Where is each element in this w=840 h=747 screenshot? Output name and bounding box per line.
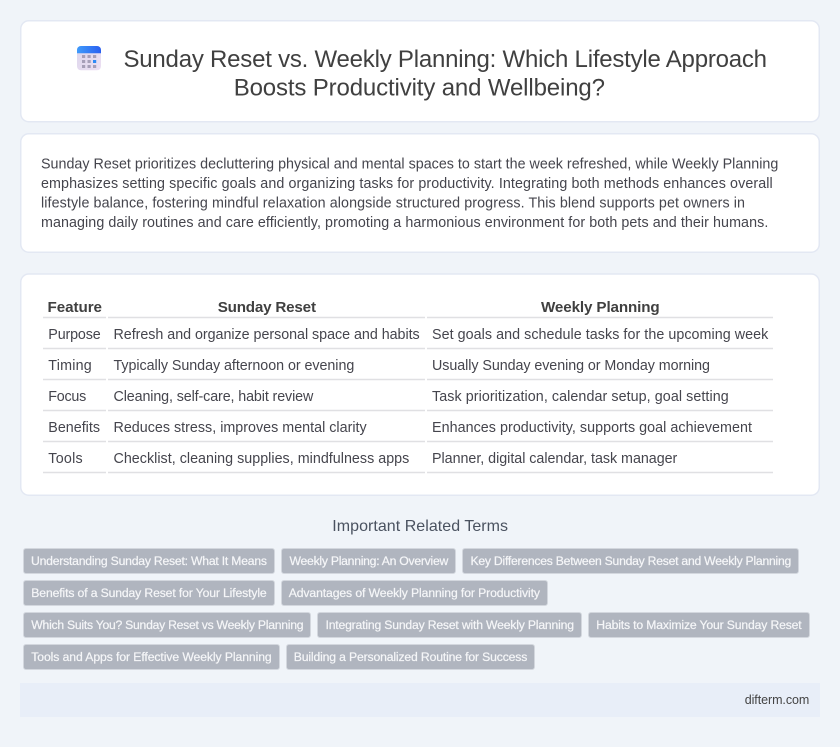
row: purpose: Purpose: [48, 327, 101, 343]
panel: description: [21, 134, 819, 252]
icon: calendar: [77, 46, 101, 70]
row: tools: [48, 451, 678, 467]
title: [124, 46, 767, 102]
tag: Integrating Sunday Reset with Weekly Planning: [326, 618, 574, 632]
tag: Which Suits You? Sunday Reset vs Weekly Planning: [31, 618, 304, 632]
tag: [318, 612, 582, 638]
row: purpose: Refresh and organize personal space and habits: [114, 327, 420, 343]
tag: [24, 644, 280, 670]
description text: [41, 156, 778, 231]
panel: header: [21, 21, 819, 122]
row: timing: Usually Sunday evening or Monday morning: [432, 358, 710, 374]
tag: Weekly Planning: An Overview: [290, 554, 448, 568]
description text: managing daily routines and care efficiently, promoting a harmonious environment for both pets and their humans.: [41, 215, 768, 231]
row: timing: Typically Sunday afternoon or evening: [114, 358, 354, 374]
row: timing: Timing: [48, 358, 92, 374]
row: timing: [48, 358, 710, 374]
row: benefits: [48, 420, 752, 436]
tag: Habits to Maximize Your Sunday Reset: [596, 618, 802, 632]
tag: Benefits of a Sunday Reset for Your Lifestyle: [31, 586, 267, 600]
row: focus: Task prioritization, calendar setup, goal setting: [432, 389, 729, 405]
tag: [24, 612, 310, 638]
row: tools: Planner, digital calendar, task manager: [432, 451, 678, 467]
row: tools: Tools: [48, 451, 83, 467]
row: focus: [48, 389, 729, 405]
title: Sunday Reset vs. Weekly Planning: Which Lifestyle Approach: [124, 46, 767, 73]
tag: Building a Personalized Routine for Success: [294, 650, 527, 664]
row: purpose: [48, 327, 769, 343]
table header: Sunday Reset: [218, 299, 316, 316]
row: purpose: Set goals and schedule tasks for the upcoming week: [432, 327, 769, 343]
row: benefits: Enhances productivity, supports goal achievement: [432, 420, 752, 436]
tag: Advantages of Weekly Planning for Productivity: [289, 586, 541, 600]
row: focus: Cleaning, self-care, habit review: [114, 389, 314, 405]
related terms tags: [24, 548, 810, 670]
panel: comparison table: [21, 274, 819, 495]
tag: Understanding Sunday Reset: What It Means: [31, 554, 267, 568]
title: Boosts Productivity and Wellbeing?: [234, 75, 605, 102]
footer: difterm.com: [745, 693, 809, 707]
tag: [282, 548, 456, 574]
row: focus: Focus: [48, 389, 86, 405]
footer: [20, 683, 820, 717]
tag: Key Differences Between Sunday Reset and Weekly Planning: [470, 554, 791, 568]
description text: emphasizes setting specific goals and organizing tasks for productivity. Integrating both methods enhances overall: [41, 176, 773, 192]
description text: Sunday Reset prioritizes decluttering physical and mental spaces to start the week refreshed, while Weekly Planning: [41, 156, 778, 172]
tag: [588, 612, 810, 638]
tag: [24, 548, 274, 574]
row: benefits: Benefits: [48, 420, 100, 436]
related terms heading: Important Related Terms: [332, 518, 508, 535]
tag: Tools and Apps for Effective Weekly Planning: [31, 650, 272, 664]
row: benefits: Reduces stress, improves mental clarity: [114, 420, 368, 436]
tag: [462, 548, 798, 574]
description text: lifestyle balance, fostering mindful relaxation alongside structured progress. This blend supports pet owners in: [41, 196, 745, 212]
tag: [286, 644, 534, 670]
table header: [48, 299, 660, 316]
table header: Feature: [48, 299, 102, 316]
tag: [282, 580, 548, 606]
tag: [24, 580, 274, 606]
table header: Weekly Planning: [541, 299, 660, 316]
row: tools: Checklist, cleaning supplies, mindfulness apps: [114, 451, 409, 467]
